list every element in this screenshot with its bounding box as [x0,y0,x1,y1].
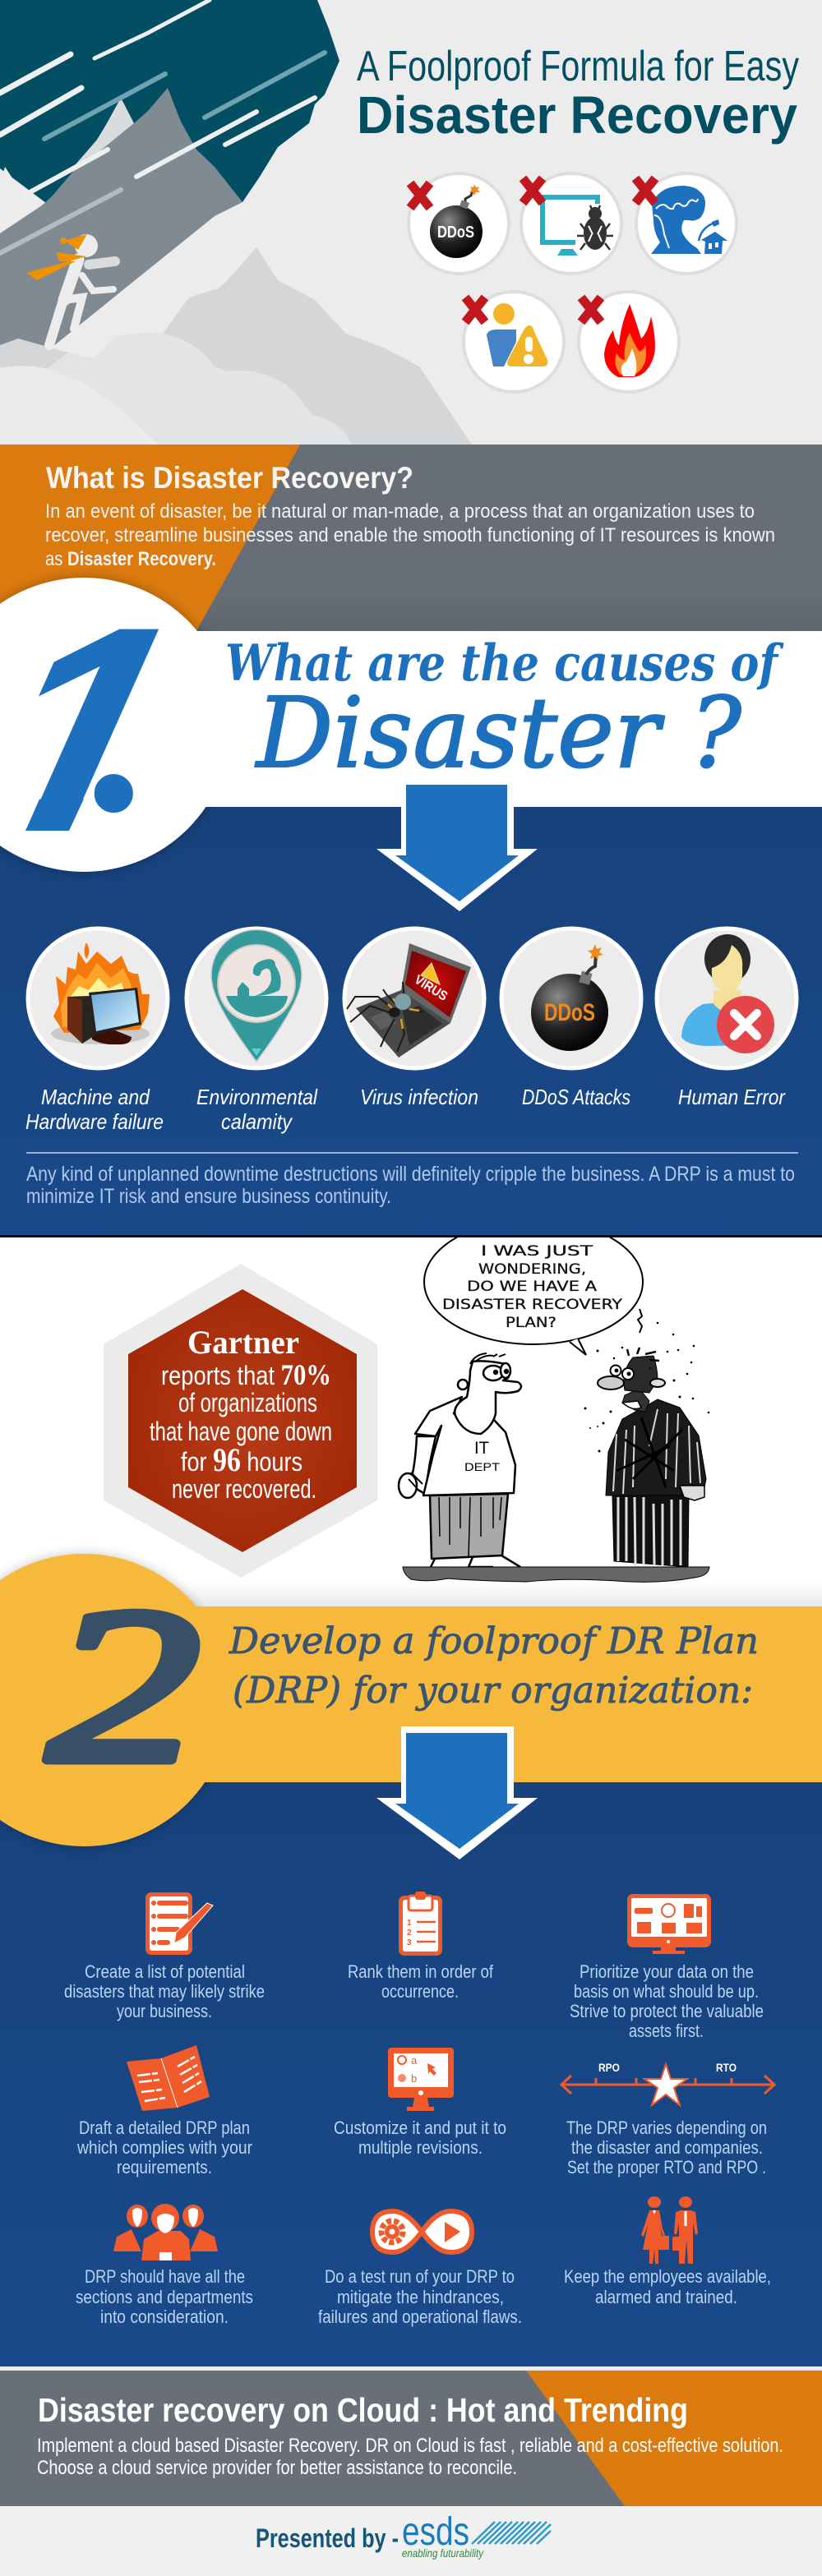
captions: Hardware failure [25,1109,164,1134]
step: draft: which complies with your [76,2137,252,2158]
icon: monitor quiz: b [411,2072,417,2085]
step: rank [348,1892,494,2002]
captions: DDoS Attacks [522,1085,630,1109]
step: test run: Do a test run of your DRP to [325,2266,515,2287]
speech bubble: DISASTER RECOVERY [442,1297,623,1313]
icon: open binder [127,2045,210,2111]
heading: hot and trending: Disaster recovery on Cloud : Hot and Trending [38,2391,688,2429]
captions: Human Error [678,1085,786,1109]
step: sections and departments: DRP should have all the [85,2266,245,2287]
panel: disaster recovery on cloud [0,2366,822,2506]
panel: gartner and cartoon [0,1219,822,1606]
step: prioritize: assets first. [629,2021,704,2041]
panel: footer presented by [0,2506,822,2576]
icon: three people [113,2204,218,2260]
panel: section 2 header [0,1554,822,2366]
step: employees: alarmed and trained. [595,2287,737,2307]
body: DR definition: as Disaster Recovery. [45,548,216,570]
logo: esds [402,2510,551,2560]
icon: tsunami crossed [635,173,737,274]
icon: computer bug crossed [521,173,621,274]
step: rank: occurrence. [381,1981,459,2002]
icon: clipboard: 2 [407,1929,412,1938]
step: prioritize [570,1894,764,2041]
gartner hexagon: that have gone down [150,1417,332,1446]
icon: clipboard [399,1892,442,1956]
icon: two employees [641,2196,698,2264]
step: test run: mitigate the hindrances, [337,2287,504,2307]
speech bubble: WONDERING, [478,1261,586,1278]
heading: causes of disaster [225,634,784,790]
step: create list: your business. [117,2001,212,2021]
title: Disaster Recovery [357,85,797,145]
icon: monitor quiz: a [411,2054,418,2067]
heading: develop DR plan: (DRP) for your organization: [233,1670,753,1712]
gartner hexagon: Gartner [187,1324,299,1361]
heading: causes of disaster: Disaster ? [255,676,742,790]
panel: causes icons and captions [25,929,798,1208]
step: test run: failures and operational flaws. [318,2306,522,2327]
body: cloud DR: Choose a cloud service provider for better assistance to reconcile. [37,2457,517,2479]
step: sections and departments: into consideration. [100,2306,229,2327]
captions: calamity [221,1109,293,1134]
clouds [0,333,351,445]
icon: list and pencil [145,1892,213,1955]
step: employees: Keep the employees available, [564,2266,771,2287]
lower grey mountains [0,247,472,445]
icon: virus laptop [344,929,484,1068]
icon: DDoS bomb [501,929,641,1068]
step: create list [64,1892,265,2021]
icon: clipboard: 1 [407,1919,412,1928]
panel: section 1 causes header [0,568,822,1238]
panel: footer presented by: Presented by - [256,2523,399,2553]
icon: DDoS bomb: DDoS [544,999,595,1026]
captions [25,1085,786,1134]
heading: develop DR plan: Develop a foolproof DR Plan [229,1620,759,1662]
gartner hexagon: for 96 hours [181,1441,302,1478]
ground [403,1567,709,1582]
icon: RPO RTO timeline: RPO [598,2061,620,2074]
icon: monitor quiz [388,2048,454,2111]
step: draft [76,2045,252,2177]
gartner hexagon [104,1264,377,1578]
figure: IT man: IT [474,1439,489,1458]
icon: monitor with data [627,1894,711,1954]
step: RTO RPO [561,2061,774,2177]
step: create list: disasters that may likely strike [64,1981,265,2002]
step: prioritize: basis on what should be up. [574,1981,759,2002]
gartner hexagon: reports that 70% [161,1358,331,1391]
title [357,43,799,145]
step: customize [334,2048,506,2158]
panel: hero header [0,0,822,445]
step: rank: Rank them in order of [348,1961,494,1982]
body: cloud DR [37,2435,783,2479]
panel: what is disaster recovery [0,445,822,631]
icon: fire crossed [579,292,679,392]
body: downtime note [26,1163,795,1208]
captions: Environmental [196,1085,318,1109]
light left peak [0,167,42,233]
step: draft: requirements. [117,2157,212,2177]
icon: RPO RTO timeline: RTO [716,2061,737,2074]
step: RTO RPO: the disaster and companies. [571,2137,763,2158]
step: customize: multiple revisions. [358,2137,483,2158]
icon: infinity gear play [372,2211,472,2252]
figure: IT man [399,1353,521,1567]
number 1 [25,629,159,831]
gartner hexagon: of organizations [178,1388,317,1417]
body: downtime note: minimize IT risk and ensure business continuity. [26,1185,391,1208]
body: DR definition [45,500,775,570]
step: employees [564,2196,771,2307]
icon: environmental pin [187,929,326,1068]
icon: virus laptop: VIRUS [412,973,450,1004]
grey mountain with climber slope [0,88,242,347]
step: RTO RPO: Set the proper RTO and RPO . [567,2157,766,2177]
step: prioritize: Strive to protect the valuable [570,2001,764,2021]
icon: human error crossed [464,292,564,392]
panel: plan steps [64,1892,774,2327]
icon: human error [657,929,797,1068]
captions: Virus infection [360,1085,478,1109]
body: DR definition: In an event of disaster, be it natural or man-made, a process that an organization uses to [45,500,755,523]
step: sections and departments [76,2204,253,2327]
icon: DDoS bomb crossed [409,173,509,274]
gartner hexagon: never recovered. [172,1474,316,1504]
step: sections and departments: sections and departments [76,2287,253,2307]
arrow down 1 [376,785,538,911]
number 2: 2 [48,1563,201,1809]
dark teal mountain [0,0,339,205]
arrow down 2 [376,1726,538,1859]
heading: develop DR plan [229,1620,759,1712]
figure: IT man: DEPT [464,1460,501,1473]
icon: RPO RTO timeline [561,2061,774,2105]
step: customize: Customize it and put it to [334,2117,506,2138]
step: create list: Create a list of potential [85,1961,245,1982]
icon: DDoS bomb crossed: DDoS [437,223,474,242]
body: DR definition: recover, streamline businesses and enable the smooth functioning of IT resources is known [45,524,775,546]
figure: frazzled man [584,1309,709,1567]
step: draft: Draft a detailed DRP plan [79,2117,250,2138]
speech bubble [423,1237,644,1356]
captions: Machine and [41,1085,150,1109]
speech bubble: I WAS JUST [481,1243,593,1260]
speech bubble: PLAN? [506,1315,556,1331]
climber figure [26,234,115,345]
step: test run [318,2211,522,2327]
logo: esds: esds [402,2510,469,2554]
number 1: . [84,597,143,861]
pale rear peak [76,98,134,168]
icon: clipboard: 3 [407,1938,412,1947]
step: RTO RPO: The DRP varies depending on [566,2117,767,2138]
snow streaks [0,0,325,253]
step: prioritize: Prioritize your data on the [580,1961,754,1982]
heading: what is DR: What is Disaster Recovery? [46,461,413,495]
icon: machine failure [28,929,168,1068]
cartoon: IT department and disaster [399,1219,709,1582]
logo: esds: enabling futurability [402,2546,484,2560]
speech bubble: DO WE HAVE A [467,1279,597,1295]
front cloud [0,366,159,445]
